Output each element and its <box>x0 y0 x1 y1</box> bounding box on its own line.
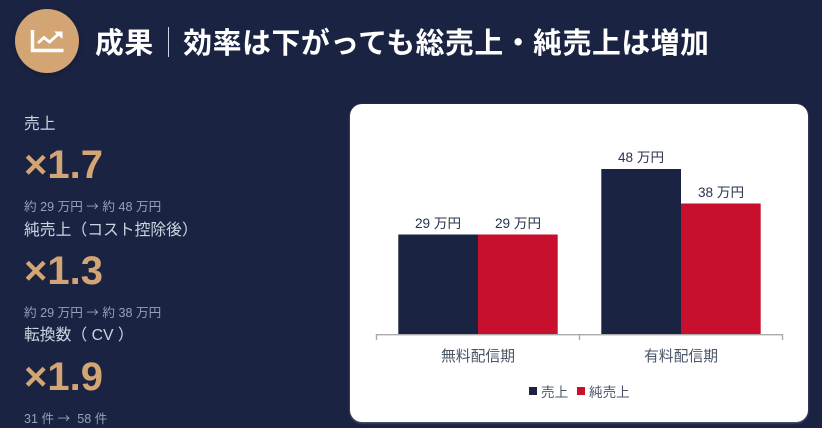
bars: paid period <box>601 169 761 335</box>
category labels: 無料配信期 <box>441 348 515 365</box>
icon: trend chart in circle <box>15 9 79 73</box>
value labels: 48 万円 <box>618 150 664 165</box>
header <box>15 9 710 74</box>
label: sales: 売上 <box>24 116 56 133</box>
detail: conversions change: 31 件 → 58 件 <box>24 408 107 427</box>
value labels <box>415 150 744 231</box>
detail: net sales change: 約 29 万円 → 約 38 万円 <box>24 302 161 321</box>
panel: KPI net sales <box>24 221 198 321</box>
bar chart <box>376 150 784 400</box>
label: conversions: 転換数（ CV ） <box>24 327 134 344</box>
panel: KPI sales <box>24 115 161 215</box>
value labels: 29 万円 <box>415 216 461 231</box>
value: conversions multiplier: ×1.9 <box>24 355 103 399</box>
label: net sales: 純売上（コスト控除後） <box>24 222 198 239</box>
value: sales multiplier: ×1.7 <box>24 143 103 187</box>
legend: 純売上 <box>589 385 630 400</box>
title: 成果 効率は下がっても総売上・純売上は増加 <box>95 21 710 62</box>
category labels: 有料配信期 <box>644 348 718 365</box>
category labels <box>441 348 718 365</box>
legend: 売上 <box>541 385 568 400</box>
panel: KPI conversions <box>24 326 134 427</box>
legend <box>529 385 630 400</box>
value: net sales multiplier: ×1.3 <box>24 249 103 293</box>
axis <box>376 335 782 340</box>
bars: free period <box>398 234 558 335</box>
detail: sales change: 約 29 万円 → 約 48 万円 <box>24 196 161 215</box>
panel: bar chart card <box>350 104 808 422</box>
value labels: 29 万円 <box>495 216 541 231</box>
value labels: 38 万円 <box>698 185 744 200</box>
